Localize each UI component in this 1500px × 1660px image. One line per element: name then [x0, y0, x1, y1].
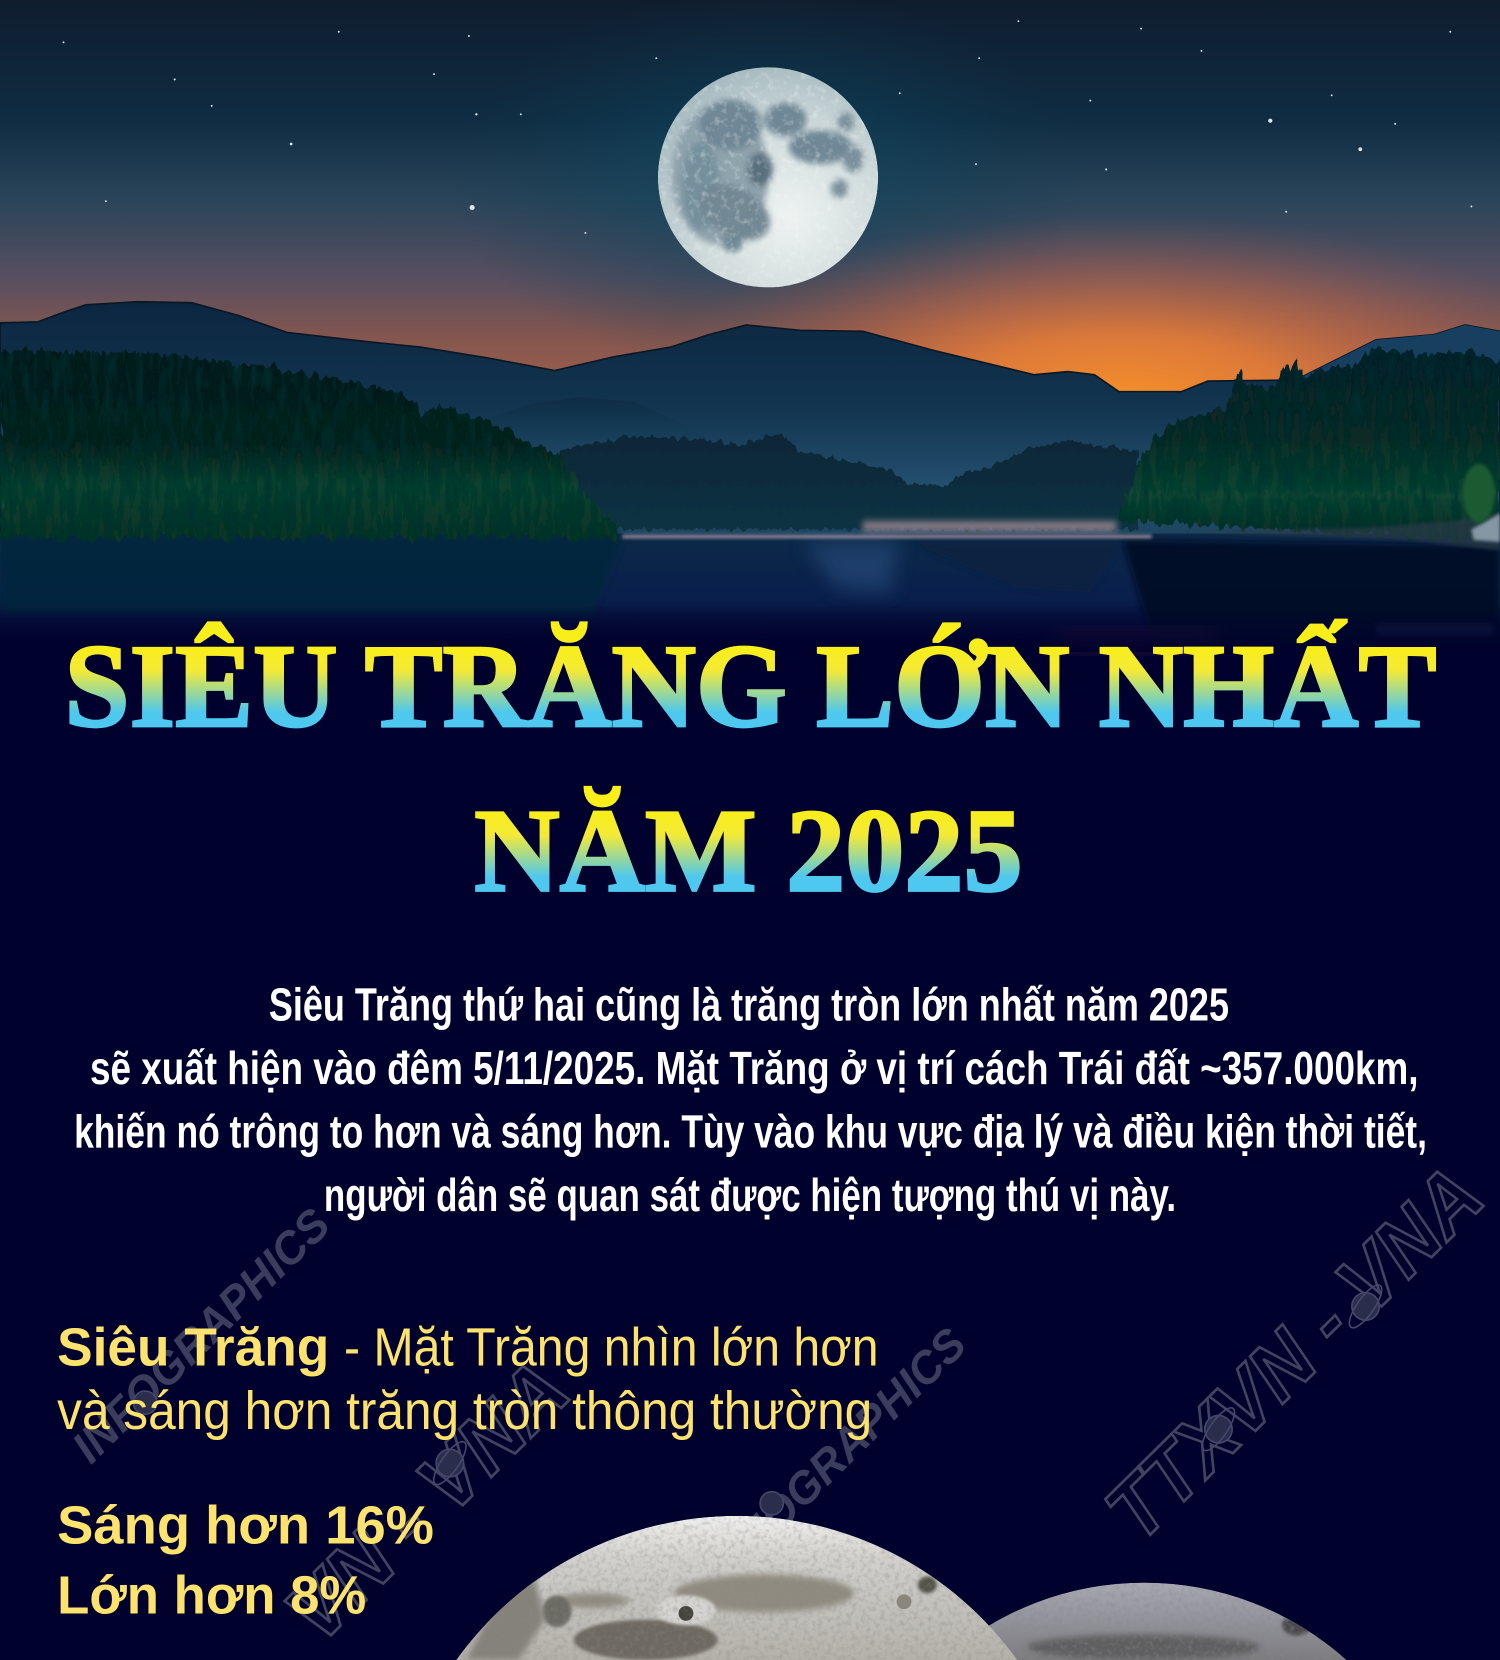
stars [63, 20, 1472, 234]
forest: distant [561, 433, 1138, 529]
title line 2: NĂM 2025 [474, 784, 1023, 916]
intro paragraph: người dân sẽ quan sát được hiện tượng thú vị này. [324, 1169, 1176, 1221]
definition text: - Mặt Trăng nhìn lớn hơn [344, 1318, 879, 1378]
definition text: và sáng hơn trăng tròn thông thường [57, 1381, 872, 1441]
moon: small [989, 1582, 1346, 1660]
intro paragraph [74, 979, 1427, 1221]
stats [57, 1496, 434, 1625]
title line 1: SIÊU TRĂNG LỚN NHẤT [65, 620, 1436, 752]
forest: right [1119, 348, 1500, 544]
moons [450, 1514, 1355, 1660]
shoreline rocks [1186, 464, 1500, 551]
icon: watermark globes [133, 1281, 1387, 1515]
mountains [0, 302, 1500, 536]
stats: Lớn hơn 8% [57, 1565, 366, 1625]
definition text [57, 1318, 879, 1441]
lake [0, 521, 1500, 652]
definition text: Siêu Trăng [57, 1318, 329, 1378]
sky [0, 0, 1500, 585]
moon: large [450, 1514, 1022, 1660]
watermark: INFOGRAPHICS centre: INFOGRAPHICS [699, 1318, 976, 1592]
watermark: TTXVN left (visible part): VN - VNA [268, 1343, 586, 1659]
stats: Sáng hơn 16% [57, 1496, 434, 1556]
forest: left [0, 350, 618, 538]
photo: night landscape [0, 0, 1500, 652]
watermarks [62, 1149, 1500, 1659]
watermark: INFOGRAPHICS upper left: INFOGRAPHICS [62, 1199, 340, 1472]
title [65, 620, 1436, 916]
intro paragraph: Siêu Trăng thứ hai cũng là trăng tròn lớn nhất năm 2025 [269, 979, 1229, 1031]
moon [656, 66, 881, 290]
